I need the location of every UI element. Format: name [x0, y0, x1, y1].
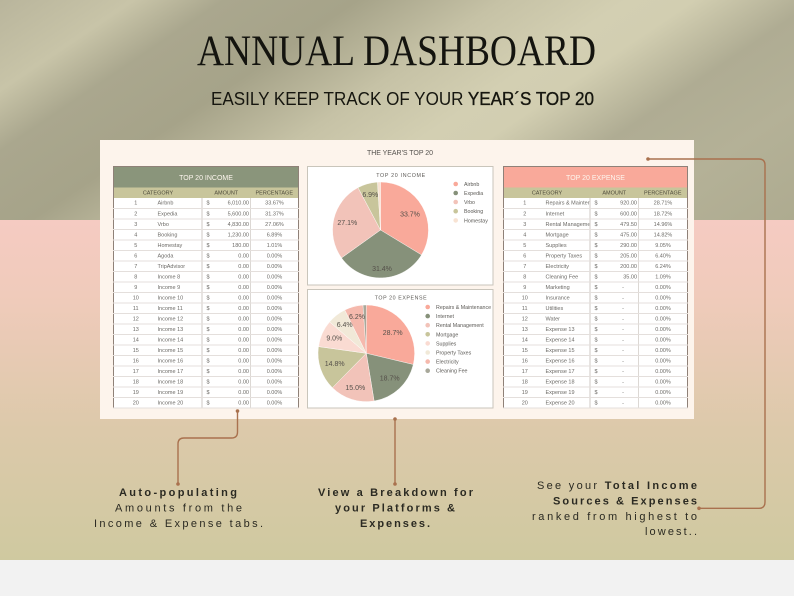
- table: top 20 income: TOP 20 INCOME: [179, 173, 233, 181]
- table: top 20 income: $: [206, 316, 210, 322]
- table: top 20 expense: Expense 15: [546, 347, 575, 353]
- table: top 20 expense: $: [594, 400, 598, 406]
- table: top 20 expense: 0.00%: [655, 295, 671, 301]
- table: top 20 expense: 13: [522, 326, 528, 332]
- legend: expense: Rental Management: [436, 323, 484, 329]
- table: top 20 expense: 11: [522, 305, 528, 311]
- pie labels: expense: 9.0%: [326, 336, 342, 342]
- table: top 20 expense: 200.00: [620, 263, 637, 269]
- pie: income slices: [333, 182, 428, 278]
- table: top 20 income: 27.06%: [265, 221, 284, 227]
- table: top 20 expense: 0.00%: [655, 368, 671, 374]
- table: top 20 expense: $: [594, 242, 598, 248]
- table: top 20 income: 12: [133, 316, 139, 322]
- caption: ranked totals: lowest..: [645, 526, 697, 538]
- table: top 20 expense: -: [622, 284, 624, 290]
- table: top 20 expense: 3: [523, 221, 526, 227]
- table: top 20 expense: $: [594, 358, 598, 364]
- table: top 20 expense: $: [594, 305, 598, 311]
- table: top 20 expense: $: [594, 389, 598, 395]
- table: top 20 expense: $: [594, 368, 598, 374]
- panel: dashboard sheet: [100, 140, 694, 419]
- table: top 20 income: Income 17: [158, 368, 183, 374]
- pie labels: income: 27.1%: [337, 220, 357, 227]
- table: top 20 income: 33.67%: [265, 200, 284, 206]
- table: top 20 expense: -: [622, 337, 624, 343]
- table: top 20 income: 0.00: [238, 274, 249, 280]
- table: top 20 income: Agoda: [158, 253, 173, 259]
- table: top 20 expense: Water: [546, 316, 560, 322]
- table: top 20 income: Income 12: [158, 316, 183, 322]
- table: top 20 income: 3: [134, 221, 137, 227]
- table: top 20 expense: 2: [523, 211, 526, 217]
- table: top 20 income: Income 8: [158, 274, 180, 280]
- table: top 20 income: 8: [134, 274, 137, 280]
- table: top 20 income: 180.00: [232, 242, 249, 248]
- table: top 20 income: Homestay: [158, 242, 182, 248]
- table: top 20 expense: Marketing: [546, 284, 570, 290]
- table: top 20 expense: AMOUNT: [602, 190, 626, 196]
- table: top 20 income: 13: [133, 326, 139, 332]
- table: top 20 expense: 0.00%: [655, 337, 671, 343]
- table: top 20 expense: Expense 18: [546, 379, 575, 385]
- table: top 20 income: 0.00%: [267, 295, 282, 301]
- table: top 20 expense: Internet: [546, 211, 564, 217]
- table: top 20 expense: 1: [523, 200, 526, 206]
- legend: income: Expedia: [464, 191, 483, 197]
- table: top 20 expense: $: [594, 347, 598, 353]
- table: top 20 income: 5,600.00: [228, 211, 249, 217]
- table: top 20 income: Income 14: [158, 337, 183, 343]
- caption: auto-populating: Auto-populating: [119, 487, 237, 499]
- table: top 20 expense: 0.00%: [655, 379, 671, 385]
- table: top 20 expense: 0.00%: [655, 400, 671, 406]
- table: top 20 expense: 0.00%: [655, 389, 671, 395]
- table: top 20 expense: $: [594, 316, 598, 322]
- pie labels: income: [337, 192, 420, 273]
- subtitle: EASILY KEEP TRACK OF YOUR YEAR´S TOP 20: [211, 89, 594, 109]
- caption: ranked totals: [532, 480, 697, 538]
- pie labels: income: 33.7%: [400, 212, 420, 218]
- table: top 20 expense: -: [622, 295, 624, 301]
- table: top 20 income: Income 20: [158, 400, 183, 406]
- table: top 20 expense: $: [594, 211, 598, 217]
- panel: income pie chart: [308, 166, 493, 285]
- table: top 20 income: 0.00%: [267, 368, 282, 374]
- table: top 20 expense: $: [594, 263, 598, 269]
- legend: expense: Supplies: [436, 341, 457, 347]
- table: top 20 expense: $: [594, 379, 598, 385]
- table: top 20 expense: 28.71%: [654, 200, 672, 206]
- table: top 20 expense: $: [594, 221, 598, 227]
- table: top 20 income: 0.00%: [267, 358, 282, 364]
- table: top 20 expense: 14: [522, 337, 528, 343]
- table: top 20 expense: -: [622, 305, 624, 311]
- table: top 20 expense: Utilities: [546, 305, 563, 311]
- table: top 20 income: 1,230.00: [228, 232, 249, 238]
- table: top 20 expense: Property Taxes: [546, 253, 582, 259]
- table: top 20 expense: $: [594, 295, 598, 301]
- table: top 20 income: 1: [134, 200, 137, 206]
- pie labels: expense: 18.7%: [380, 376, 400, 382]
- caption: ranked totals: See your Total Income: [537, 480, 697, 492]
- table: top 20 income: 0.00: [238, 347, 249, 353]
- arrow: charts to breakdown caption: [393, 417, 397, 486]
- table: top 20 income: 1.01%: [267, 242, 282, 248]
- caption: auto-populating: [94, 487, 263, 530]
- legend: income: Airbnb: [464, 182, 479, 188]
- table: top 20 expense: 0.00%: [655, 316, 671, 322]
- table: top 20 expense: Insurance: [546, 295, 570, 301]
- table: top 20 expense: -: [622, 389, 624, 395]
- table: top 20 income: $: [206, 221, 210, 227]
- table: top 20 income: 9: [134, 284, 137, 290]
- table: top 20 expense: 7: [523, 263, 526, 269]
- legend: expense: Mortgage: [436, 332, 458, 338]
- table: top 20 income: 0.00: [238, 337, 249, 343]
- table: top 20 expense: PERCENTAGE: [644, 190, 681, 196]
- legend: income: Vrbo: [464, 200, 475, 206]
- table: top 20 expense: -: [622, 400, 624, 406]
- table: top 20 income: 0.00: [238, 368, 249, 374]
- table: top 20 income: $: [206, 400, 210, 406]
- legend: expense: Cleaning Fee: [436, 369, 468, 375]
- table: top 20 income: $: [206, 368, 210, 374]
- table: top 20 income: 0.00: [238, 295, 249, 301]
- table: top 20 expense: 6.40%: [655, 253, 671, 259]
- table: top 20 income: 0.00%: [267, 379, 282, 385]
- legend: expense: Repairs & Maintenance: [436, 305, 491, 311]
- table: top 20 expense: 9.05%: [655, 242, 671, 248]
- pie labels: income: 6.9%: [362, 192, 378, 199]
- table: top 20 income: Booking: [158, 232, 177, 238]
- table: top 20 income: $: [206, 326, 210, 332]
- table: top 20 income: 0.00: [238, 253, 249, 259]
- table: top 20 income: Income 10: [158, 295, 183, 301]
- table: top 20 expense: 600.00: [620, 211, 637, 217]
- table: top 20 expense: Expense 14: [546, 337, 575, 343]
- table: top 20 income: 0.00%: [267, 337, 282, 343]
- table: top 20 expense: 4: [523, 232, 526, 238]
- table: top 20 expense: 0.00%: [655, 358, 671, 364]
- table: top 20 income: 0.00%: [267, 326, 282, 332]
- pie labels: income: 31.4%: [372, 266, 392, 273]
- table: top 20 expense: 1.09%: [655, 274, 671, 280]
- table: top 20 income: 15: [133, 347, 139, 353]
- table: top 20 expense: $: [594, 284, 598, 290]
- table: top 20 expense: 20: [522, 400, 528, 406]
- table: top 20 income: 0.00: [238, 305, 249, 311]
- table: top 20 income: 18: [133, 379, 139, 385]
- table: top 20 income: Income 19: [158, 389, 183, 395]
- table: top 20 expense: Electricity: [546, 263, 569, 269]
- table: top 20 income: $: [206, 389, 210, 395]
- table: top 20 income: 0.00: [238, 263, 249, 269]
- table: top 20 income: 19: [133, 389, 139, 395]
- table: top 20 income: 20: [133, 400, 139, 406]
- panel heading: THE YEAR'S TOP 20: [367, 150, 433, 157]
- legend: income: Booking: [464, 209, 483, 215]
- table: top 20 income: 0.00: [238, 326, 249, 332]
- table: top 20 income: $: [206, 200, 210, 206]
- table: top 20 expense: 12: [522, 316, 528, 322]
- table: top 20 expense: 6.24%: [655, 263, 671, 269]
- caption: breakdown: View a Breakdown for: [318, 487, 474, 499]
- background: olive top band: [0, 0, 794, 220]
- table: top 20 income: Income 18: [158, 379, 183, 385]
- table: top 20 income: Vrbo: [158, 221, 169, 227]
- table: top 20 income: 5: [134, 242, 137, 248]
- caption: breakdown: [318, 487, 474, 530]
- table: top 20 expense: 19: [522, 389, 528, 395]
- table: top 20 expense: 0.00%: [655, 284, 671, 290]
- table: top 20 income: $: [206, 305, 210, 311]
- table: top 20 income: 14: [133, 337, 139, 343]
- caption: ranked totals: Sources & Expenses: [553, 496, 697, 508]
- table: top 20 income: 10: [133, 295, 139, 301]
- table: top 20 income: Airbnb: [158, 200, 173, 206]
- arrow: expense table to ranked caption: [646, 157, 765, 510]
- chart title: top 20 expense: TOP 20 EXPENSE: [375, 296, 427, 302]
- pie: expense slices: [318, 305, 415, 402]
- table: top 20 income: 0.00%: [267, 316, 282, 322]
- table: top 20 income: Income 16: [158, 358, 183, 364]
- pie labels: expense: [325, 314, 403, 392]
- table: top 20 income: 6.89%: [267, 232, 282, 238]
- background: pink to khaki gradient: [0, 220, 794, 560]
- table: top 20 expense: $: [594, 274, 598, 280]
- pie labels: expense: 6.2%: [349, 314, 365, 321]
- table: top 20 expense: Expense 19: [546, 389, 575, 395]
- caption: breakdown: your Platforms &: [335, 502, 455, 514]
- table: top 20 expense: 0.00%: [655, 326, 671, 332]
- table: top 20 expense: 475.00: [620, 232, 637, 238]
- table: top 20 income: 0.00: [238, 316, 249, 322]
- table: top 20 income: $: [206, 379, 210, 385]
- table: top 20 income: [113, 166, 299, 408]
- legend: expense: Internet: [436, 314, 454, 320]
- table: top 20 income: $: [206, 274, 210, 280]
- table: top 20 income: TripAdvisor: [158, 263, 185, 269]
- table: top 20 expense: Expense 16: [546, 358, 575, 364]
- table: top 20 income: Expedia: [158, 211, 177, 217]
- table: top 20 income: 0.00%: [267, 253, 282, 259]
- table: top 20 expense: -: [622, 326, 624, 332]
- table: top 20 expense: $: [594, 200, 598, 206]
- legend: expense: Property Taxes: [436, 350, 472, 356]
- table: top 20 income: $: [206, 232, 210, 238]
- table: top 20 expense: 18: [522, 379, 528, 385]
- table: top 20 expense: 205.00: [620, 253, 637, 259]
- table: top 20 expense: 6: [523, 253, 526, 259]
- arrow: income table to auto-populating caption: [176, 409, 239, 486]
- table: top 20 income: 0.00: [238, 389, 249, 395]
- table: top 20 income: 0.00: [238, 284, 249, 290]
- table: top 20 income: Income 11: [158, 305, 183, 311]
- table: top 20 income: $: [206, 347, 210, 353]
- title: ANNUAL DASHBOARD: [197, 28, 596, 75]
- table: top 20 expense: Expense 20: [546, 400, 575, 406]
- table: top 20 income: $: [206, 242, 210, 248]
- table: top 20 expense: Expense 13: [546, 326, 575, 332]
- table: top 20 income: Income 9: [158, 284, 180, 290]
- table: top 20 income: $: [206, 211, 210, 217]
- table: top 20 expense: 0.00%: [655, 305, 671, 311]
- table: top 20 expense: -: [622, 379, 624, 385]
- pie labels: expense: 6.4%: [337, 322, 353, 329]
- table: top 20 income: 0.00%: [267, 347, 282, 353]
- table: top 20 expense: 16: [522, 358, 528, 364]
- table: top 20 expense: 14.96%: [654, 221, 672, 227]
- table: top 20 expense: Expense 17: [546, 368, 575, 374]
- table: top 20 expense: 35.00: [623, 274, 637, 280]
- table: top 20 income: 7: [134, 263, 137, 269]
- table: top 20 income: PERCENTAGE: [256, 190, 293, 196]
- table: top 20 income: 0.00: [238, 400, 249, 406]
- table: top 20 expense: 14.82%: [654, 232, 672, 238]
- table: top 20 expense: $: [594, 326, 598, 332]
- table: top 20 expense: 8: [523, 274, 526, 280]
- table: top 20 expense: 17: [522, 368, 528, 374]
- table: top 20 expense: Cleaning Fee: [546, 274, 578, 280]
- table: top 20 expense: 5: [523, 242, 526, 248]
- pie labels: expense: 14.8%: [325, 361, 345, 368]
- table: top 20 income: 4,830.00: [228, 221, 249, 227]
- table: top 20 income: 0.00%: [267, 389, 282, 395]
- caption: breakdown: Expenses.: [360, 518, 430, 530]
- chart title: top 20 income: TOP 20 INCOME: [376, 173, 426, 179]
- pie labels: expense: 28.7%: [383, 330, 403, 337]
- table: top 20 income: Income 13: [158, 326, 183, 332]
- table: top 20 expense: -: [622, 347, 624, 353]
- table: top 20 income: 6: [134, 253, 137, 259]
- table: top 20 income: 0.00%: [267, 305, 282, 311]
- table: top 20 income: 31.37%: [265, 211, 284, 217]
- caption: auto-populating: Amounts from the: [115, 502, 242, 514]
- table: top 20 expense: 15: [522, 347, 528, 353]
- table: top 20 expense: $: [594, 253, 598, 259]
- table: top 20 expense: 18.72%: [654, 211, 672, 217]
- table: top 20 income: 17: [133, 368, 139, 374]
- table: top 20 income: 11: [133, 305, 139, 311]
- table: top 20 expense: 290.00: [620, 242, 637, 248]
- table: top 20 income: $: [206, 284, 210, 290]
- table: top 20 expense: -: [622, 368, 624, 374]
- table: top 20 expense: CATEGORY: [532, 190, 562, 196]
- table: top 20 income: 0.00%: [267, 400, 282, 406]
- table: top 20 expense: $: [594, 232, 598, 238]
- table: top 20 expense: Supplies: [546, 242, 567, 248]
- table: top 20 income: 0.00%: [267, 263, 282, 269]
- pie labels: expense: 15.0%: [345, 385, 365, 392]
- caption: ranked totals: ranked from highest to: [532, 511, 697, 523]
- caption: auto-populating: Income & Expense tabs.: [94, 518, 263, 530]
- table: top 20 expense: $: [594, 337, 598, 343]
- panel: expense pie chart: [308, 290, 493, 408]
- legend: expense: [425, 305, 491, 375]
- table: top 20 income: 4: [134, 232, 137, 238]
- table: top 20 income: $: [206, 253, 210, 259]
- table: top 20 expense: Mortgage: [546, 232, 569, 238]
- table: top 20 income: AMOUNT: [214, 190, 238, 196]
- table: top 20 income: 16: [133, 358, 139, 364]
- legend: expense: Electricity: [436, 360, 459, 366]
- table: top 20 income: $: [206, 295, 210, 301]
- table: top 20 expense: 479.50: [620, 221, 637, 227]
- table: top 20 income: 0.00: [238, 379, 249, 385]
- table: top 20 expense: 9: [523, 284, 526, 290]
- table: top 20 income: Income 15: [158, 347, 183, 353]
- table: top 20 income: 0.00%: [267, 284, 282, 290]
- table: top 20 income: CATEGORY: [143, 190, 173, 196]
- table: top 20 income: $: [206, 263, 210, 269]
- table: top 20 income: 2: [134, 211, 137, 217]
- table: top 20 income: 0.00%: [267, 274, 282, 280]
- table: top 20 expense: -: [622, 358, 624, 364]
- table: top 20 expense: 0.00%: [655, 347, 671, 353]
- table: top 20 expense: 10: [522, 295, 528, 301]
- legend: income: [453, 182, 488, 224]
- table: top 20 income: 6,010.00: [228, 200, 249, 206]
- table: top 20 expense: -: [622, 316, 624, 322]
- table: top 20 income: $: [206, 337, 210, 343]
- table: top 20 expense: TOP 20 EXPENSE: [566, 173, 625, 181]
- table: top 20 expense: 920.00: [620, 200, 637, 206]
- legend: income: Homestay: [464, 218, 488, 224]
- table: top 20 expense: [503, 166, 688, 408]
- table: top 20 income: 0.00: [238, 358, 249, 364]
- table: top 20 income: $: [206, 358, 210, 364]
